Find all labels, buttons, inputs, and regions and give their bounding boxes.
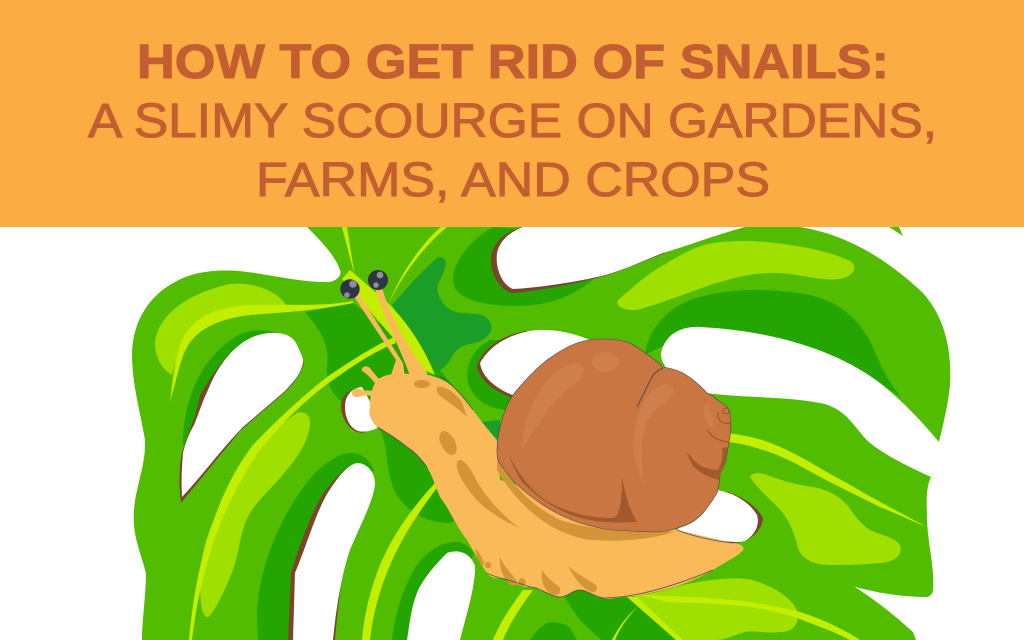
shell dark folds <box>508 447 728 523</box>
snail outline shadows <box>377 377 733 598</box>
title line 1: HOW TO GET RID OF SNAILS: <box>137 36 889 89</box>
snail tentacles <box>352 288 428 398</box>
white holes <box>182 227 1024 640</box>
brown hole edges <box>179 227 763 640</box>
shell spiral tip <box>707 408 730 442</box>
title line 3: FARMS, AND CROPS <box>256 154 770 207</box>
shell highlights <box>522 352 713 487</box>
snail eye right <box>368 270 388 290</box>
illustration: monstera leaf <box>132 227 1024 640</box>
snail body <box>369 374 743 599</box>
snail body shading <box>414 380 677 595</box>
light patches <box>155 241 901 640</box>
shell seam <box>637 368 663 407</box>
snail shell <box>497 339 731 532</box>
dark patches <box>183 227 902 640</box>
deep green patches <box>392 257 500 445</box>
veins <box>170 227 927 640</box>
title <box>88 36 937 207</box>
header banner <box>0 0 1024 227</box>
leaf tip fragment <box>889 227 903 236</box>
illustration: snail <box>340 270 743 599</box>
title line 2: A SLIMY SCOURGE ON GARDENS, <box>88 95 937 148</box>
leaf body <box>132 227 950 640</box>
snail eye left <box>340 279 360 299</box>
